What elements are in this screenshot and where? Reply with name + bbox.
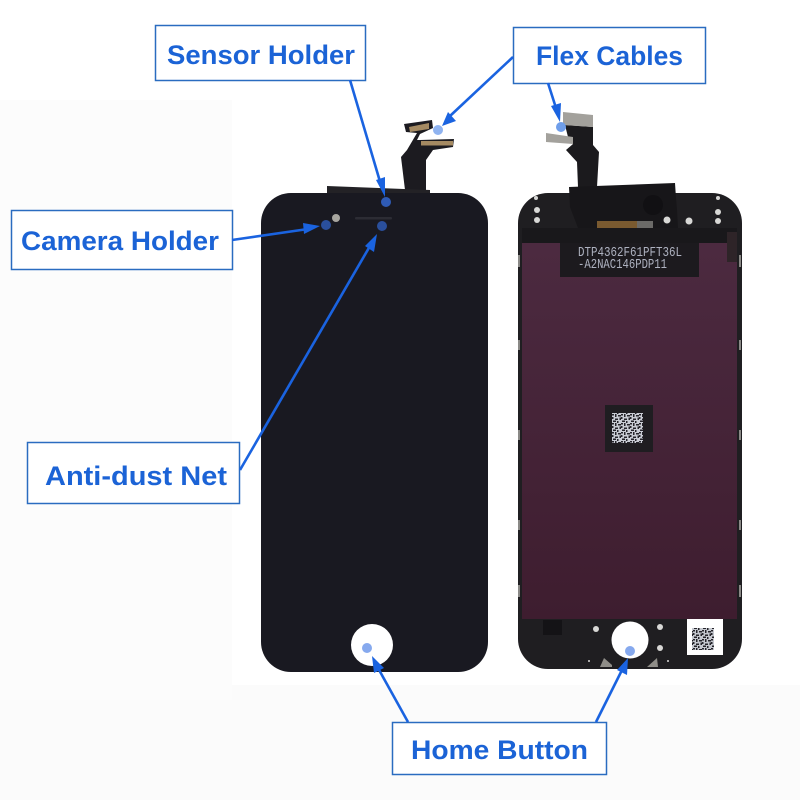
front camera lens <box>332 214 340 222</box>
arrow: Sensor Holder to sensor <box>350 80 391 207</box>
centre QR code <box>605 405 653 452</box>
front flex cable <box>327 120 454 193</box>
back home button <box>612 622 648 658</box>
label: Anti-dust Net: Anti-dust Net <box>45 461 227 491</box>
label: Anti-dust Net <box>28 442 240 504</box>
arrow: Flex Cables to back flex <box>548 83 566 132</box>
label: Home Button: Home Button <box>411 735 588 765</box>
arrow: Home Button to front home <box>362 643 408 722</box>
arrow: Anti-dust Net to earpiece <box>240 221 387 470</box>
camera bracket <box>569 183 678 228</box>
camera recess <box>643 195 663 215</box>
label: Sensor Holder: Sensor Holder <box>167 40 355 70</box>
mounting screws <box>534 196 721 662</box>
earpiece slot <box>355 217 392 220</box>
back view of screen assembly <box>518 112 742 669</box>
label: Home Button <box>392 722 606 774</box>
label: Camera Holder <box>12 210 232 270</box>
white QR sticker <box>687 619 723 655</box>
home button <box>351 624 393 666</box>
panel serial label: DTP4362F61PFT36L <box>578 245 682 261</box>
label: Camera Holder: Camera Holder <box>21 226 220 256</box>
side clips <box>518 255 741 597</box>
label: Sensor Holder <box>156 26 366 80</box>
ribbon strip <box>597 221 637 228</box>
front view of screen assembly <box>261 120 488 672</box>
front phone body <box>261 193 488 672</box>
back phone frame <box>518 193 742 669</box>
arrow: Home Button to back home <box>596 646 635 722</box>
label: Flex Cables <box>514 28 706 84</box>
back flex cable <box>546 112 599 187</box>
arrow: Camera Holder to camera <box>232 220 331 240</box>
dark chips near home button <box>543 620 658 667</box>
arrow: Flex Cables to front flex <box>433 57 513 135</box>
label: Flex Cables: Flex Cables <box>536 41 683 71</box>
panel serial label: -A2NAC146PDP11 <box>578 257 667 273</box>
panel serial label <box>560 243 699 277</box>
purple LCD panel <box>522 243 737 619</box>
